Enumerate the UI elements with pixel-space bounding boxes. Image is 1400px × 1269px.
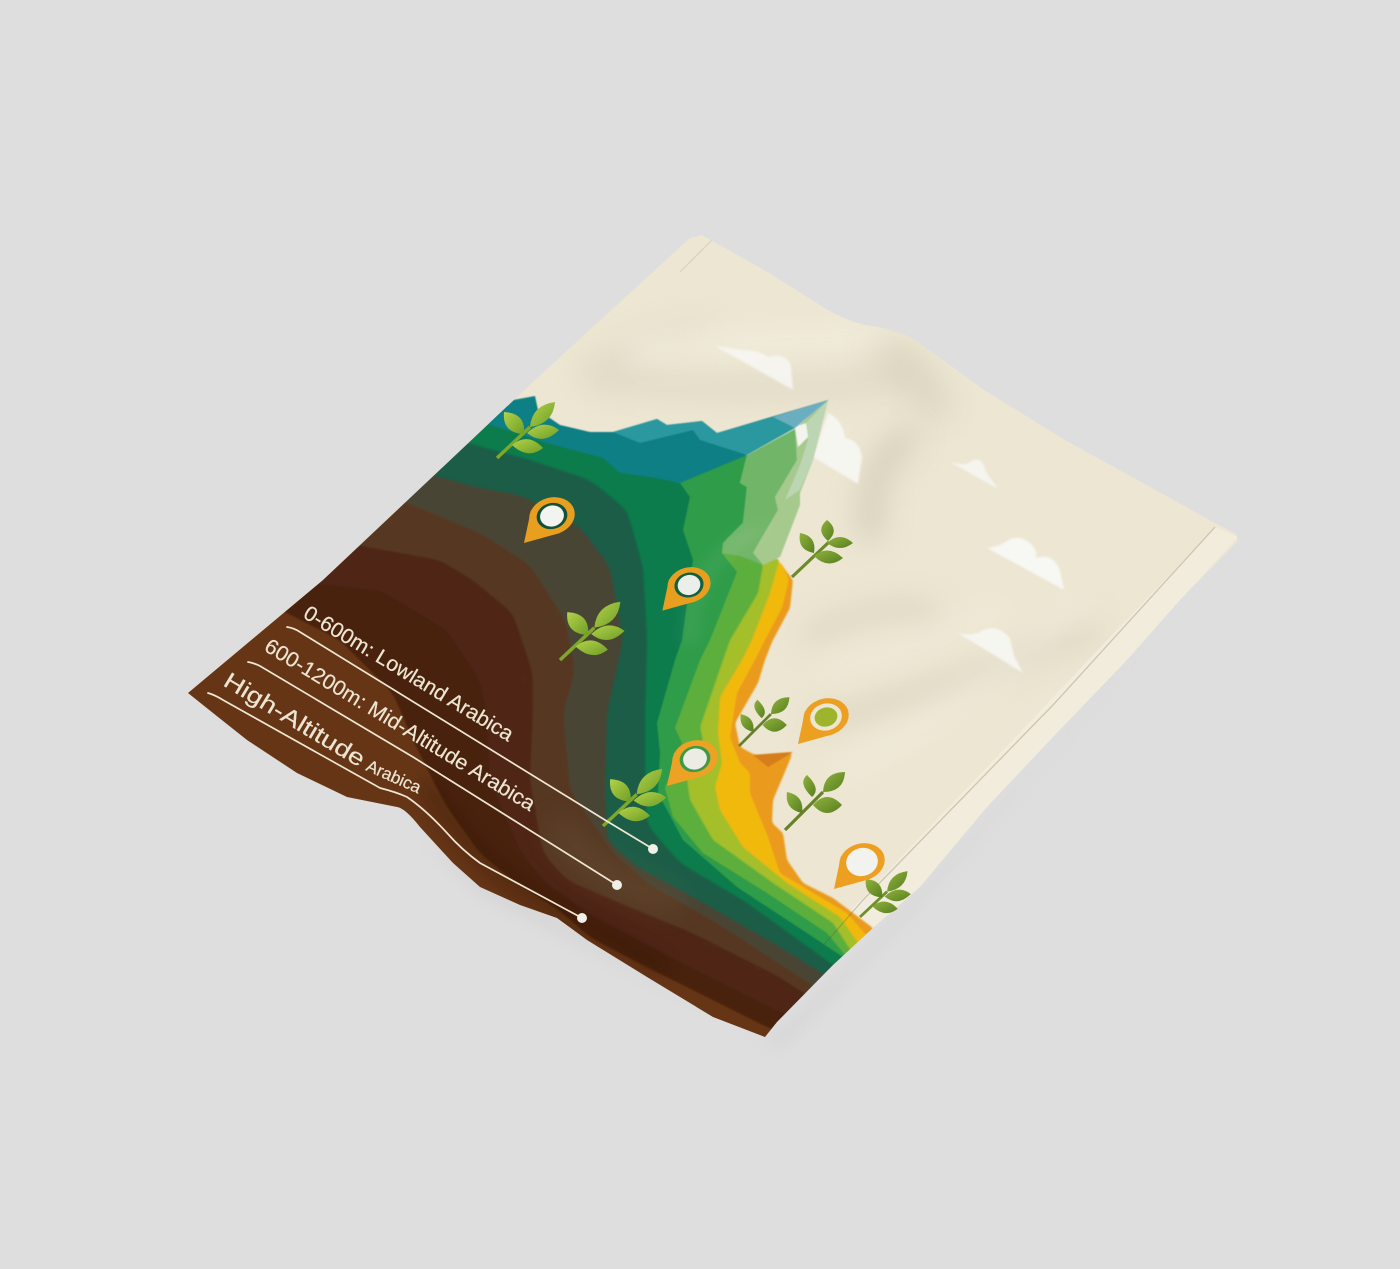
plant 1 [497, 402, 559, 458]
layer: pale ridge top [785, 400, 828, 500]
plant 3 [603, 769, 666, 826]
infographic: printed towel mockup [188, 235, 1238, 1037]
layer: medium green [248, 406, 848, 1008]
towel [188, 235, 1238, 1037]
panel: cream sky [515, 235, 1238, 910]
cloud 4 [987, 538, 1064, 590]
dot 3 [577, 913, 587, 923]
layer: dark orange shade [753, 752, 793, 767]
leader line 3 [208, 693, 582, 918]
clouds [715, 346, 1064, 673]
cloud 1 [715, 346, 793, 390]
plant 2 [560, 602, 624, 660]
fabric fold shading on print [430, 530, 760, 965]
label: lowland: 0-600m: Lowland Arabica [299, 602, 518, 746]
layer: brown 2 [318, 546, 805, 1014]
layer: light green [664, 541, 850, 955]
hem: right edge [846, 527, 1238, 928]
layer: yellow [715, 552, 866, 942]
layer: light teal ridge [488, 396, 828, 483]
mountain: teal [488, 396, 828, 483]
layer: orange [729, 562, 874, 936]
layer: deep teal green [434, 442, 833, 975]
layer: dark green [467, 406, 842, 966]
fabric fold shading on sky [590, 330, 1090, 722]
mountain: peak [773, 400, 828, 428]
plant 4 [792, 520, 853, 577]
marker dots [577, 844, 658, 923]
label: high-altitude [219, 667, 425, 797]
label: high-altitude: Arabica [363, 756, 425, 797]
layer: olive brown [405, 475, 824, 986]
leader line 2 [248, 662, 617, 885]
plant 7 [860, 871, 911, 917]
leader lines [208, 627, 653, 918]
mountain: light band [613, 417, 795, 455]
label: high-altitude: High-Altitude [219, 667, 370, 772]
chart: altitude layers [188, 400, 874, 1037]
hem stitch line [863, 527, 1215, 900]
layer: olive [686, 558, 858, 950]
layer: soft green ridge [722, 429, 797, 565]
layer: light brown strip [188, 612, 772, 1037]
cloud 2 [813, 413, 862, 484]
dot 1 [648, 844, 658, 854]
layer: brown 3 [285, 584, 785, 1030]
pin 4 [798, 693, 853, 744]
plant 6 [785, 772, 845, 830]
cloth shadow [420, 545, 1238, 1050]
label: mid-altitude: 600-1200m: Mid-Altitude Arabica [260, 635, 539, 816]
cloud 3 [953, 459, 996, 488]
leader line 1 [287, 627, 653, 849]
pin 1 [524, 492, 579, 543]
layer: brown 1 [360, 502, 813, 993]
pin 3 [667, 735, 722, 786]
plant 5 [739, 697, 789, 746]
layer: pale ridge [753, 400, 828, 565]
pin 2 [662, 562, 715, 611]
dot 2 [612, 880, 622, 890]
pin 5 [834, 838, 889, 889]
cloud 5 [958, 628, 1023, 673]
layer: ridge gap [795, 423, 808, 447]
